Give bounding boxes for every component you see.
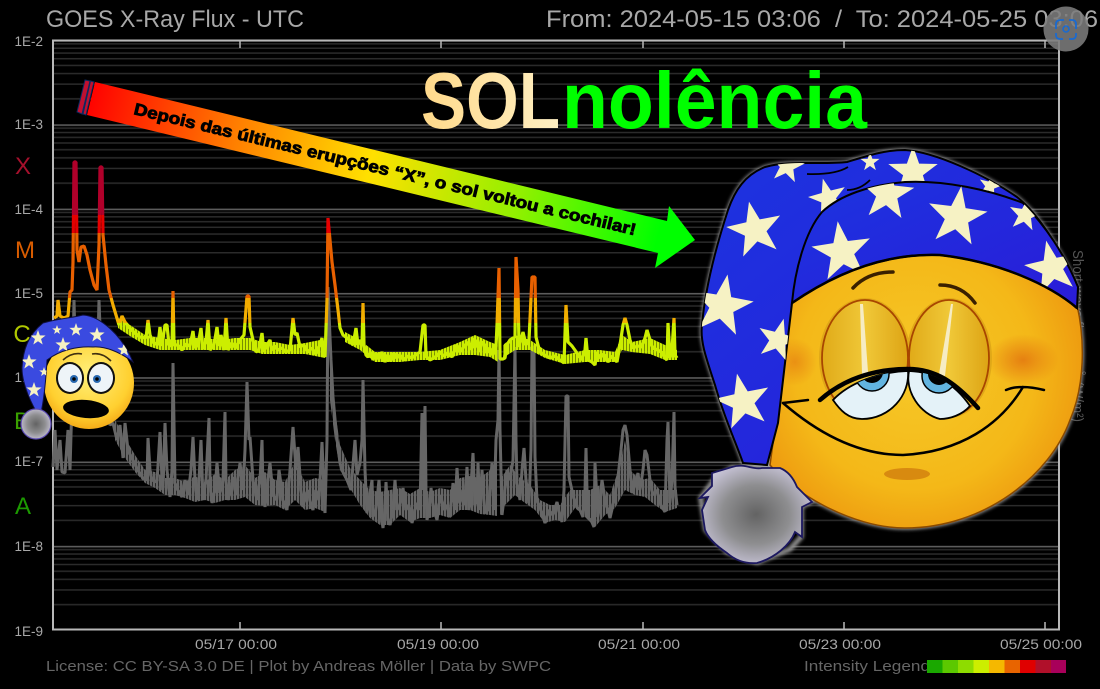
intensity legend <box>927 660 1066 673</box>
y axis labels: 1E-5 <box>14 286 43 301</box>
y axis labels: 1E-8 <box>14 539 43 554</box>
small emoji mouth <box>62 398 110 420</box>
arrow body <box>87 82 695 268</box>
arrow text: Depois das últimas erupções “X”, o sol voltou a cochilar! <box>132 100 638 239</box>
y axis labels: 1E-4 <box>14 202 43 217</box>
right axis label: Short-wave flux 1-8 Å (W/m²) <box>1069 250 1086 422</box>
y axis labels: 1E-6 <box>14 370 43 385</box>
flare class letters: X <box>15 153 31 180</box>
flare class letters: A <box>15 493 31 520</box>
y axis labels: 1E-9 <box>14 624 43 639</box>
y axis labels: 1E-2 <box>14 34 43 49</box>
title: SOL: SOL <box>421 56 560 145</box>
arrow tail stripes <box>77 80 94 115</box>
chart title: GOES X-Ray Flux - UTC <box>46 6 304 33</box>
x axis labels: 05/17 00:00 <box>195 636 277 652</box>
emoji face <box>770 255 1082 528</box>
emoji chin highlight <box>884 468 930 480</box>
small emoji hat <box>21 315 133 418</box>
y axis labels: 1E-7 <box>14 454 43 469</box>
small emoji face <box>44 337 134 429</box>
small emoji brows <box>63 354 111 361</box>
emoji hat <box>688 145 1083 465</box>
small emoji eyes <box>56 362 115 394</box>
emoji glow <box>700 150 1082 563</box>
emoji pompom <box>700 466 812 563</box>
emoji cheek blush <box>987 334 1059 386</box>
x axis labels: 05/23 00:00 <box>799 636 881 652</box>
arrow with message <box>77 80 695 268</box>
flare class letters: C <box>13 321 31 348</box>
long-wave flux line (coloured by flare class) <box>54 162 677 365</box>
license credit: License: CC BY-SA 3.0 DE | Plot by Andreas Möller | Data by SWPC <box>46 659 551 675</box>
flare class letters <box>13 153 35 520</box>
x axis labels: 05/19 00:00 <box>397 636 479 652</box>
plot grid and frame <box>53 40 1059 630</box>
short-wave flux line (grey) <box>53 287 677 528</box>
title: nolência: nolência <box>562 56 867 145</box>
x axis labels <box>195 636 1082 652</box>
y axis labels <box>14 34 43 639</box>
flare class letters: B <box>14 408 30 435</box>
emoji smile <box>783 387 1044 455</box>
intensity legend label: Intensity Legend <box>804 659 930 675</box>
icon: lens badge <box>1044 6 1088 52</box>
icon: small shocked sleeping emoji <box>21 315 134 439</box>
icon: big sleepy emoji <box>688 145 1083 563</box>
x axis labels: 05/21 00:00 <box>598 636 680 652</box>
emoji brows <box>853 272 975 303</box>
emoji eyes <box>819 298 992 419</box>
small emoji pompom <box>21 409 51 439</box>
x axis labels: 05/25 00:00 <box>1000 636 1082 652</box>
flare class letters: M <box>15 237 35 264</box>
y axis labels: 1E-3 <box>14 117 43 132</box>
date range: From: 2024-05-15 03:06 / To: 2024-05-25 03:06 <box>546 6 1098 33</box>
